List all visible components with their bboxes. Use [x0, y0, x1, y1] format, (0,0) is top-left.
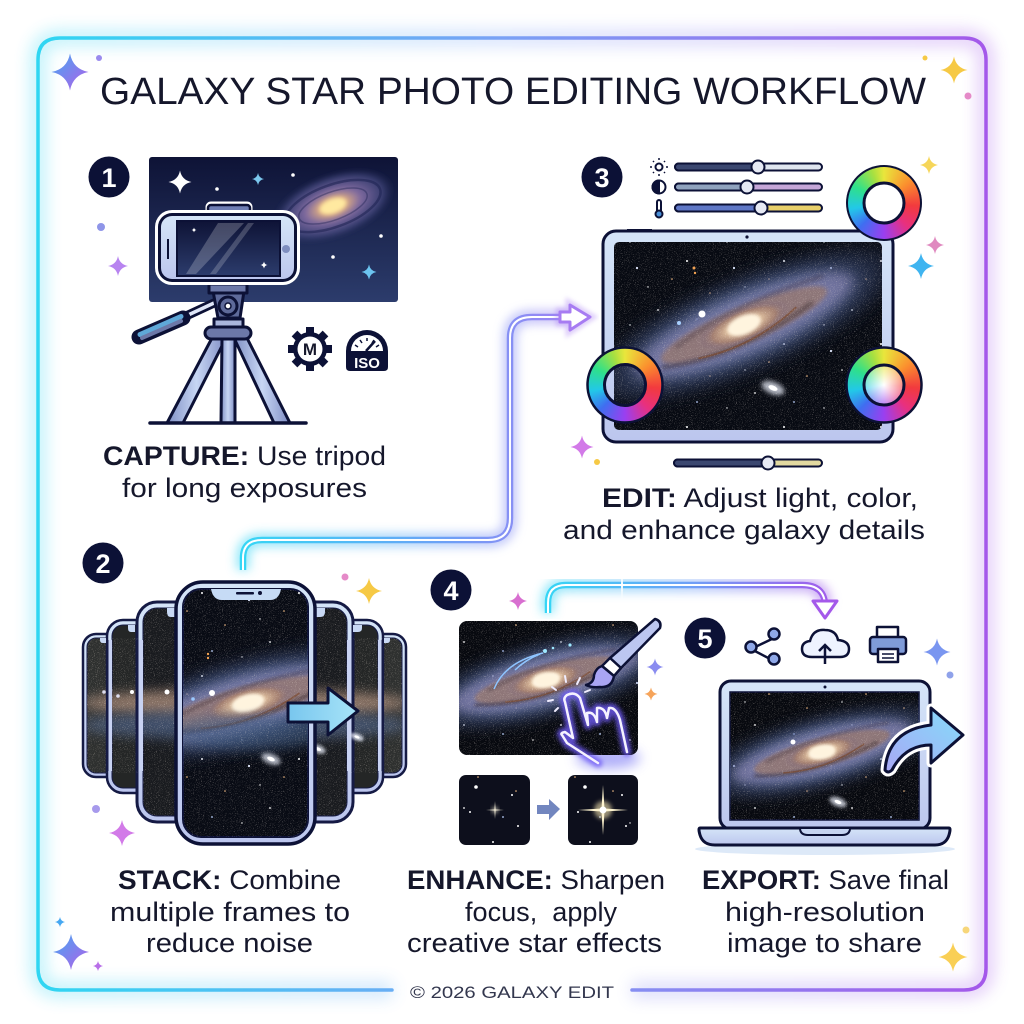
export caption: image to share	[727, 928, 922, 958]
edit caption	[563, 483, 925, 545]
panel: step 2 stack	[72, 542, 424, 958]
capture caption: for long exposures	[122, 473, 367, 503]
sparkles	[570, 156, 944, 465]
stack caption: reduce noise	[146, 928, 313, 958]
color wheel: right	[846, 348, 922, 422]
transfer arrow	[288, 688, 358, 735]
stack caption: STACK: Combine	[118, 865, 341, 895]
panel: step 4 enhance	[408, 570, 664, 952]
icon: ISO gauge	[346, 330, 388, 372]
icon: manual mode gear: M	[303, 340, 317, 359]
badge 1	[88, 156, 130, 198]
panel: step 5 export	[677, 618, 967, 958]
color wheel: top right	[846, 165, 922, 241]
badge 2	[82, 542, 124, 584]
icon: paintbrush	[586, 619, 660, 687]
color wheel: left	[588, 348, 662, 422]
edit caption: EDIT: Adjust light, color,	[602, 483, 918, 513]
tablet with galaxy	[602, 229, 894, 444]
icon: neon tap hand	[548, 676, 627, 763]
badge 4	[430, 570, 472, 610]
edit caption: and enhance galaxy details	[563, 515, 925, 545]
export caption: EXPORT: Save final	[702, 865, 949, 895]
title: GALAXY STAR PHOTO EDITING WORKFLOW	[100, 71, 926, 113]
badge 5	[684, 618, 726, 658]
icon: share	[746, 628, 780, 664]
capture caption	[103, 441, 386, 503]
enhance caption: ENHANCE: Sharpen	[407, 865, 665, 895]
badge 5: 5	[697, 624, 713, 654]
badge 3	[582, 156, 622, 198]
enhance caption: creative star effects	[407, 928, 662, 958]
export caption	[702, 865, 949, 958]
adjustment sliders	[650, 158, 822, 218]
stack caption	[110, 865, 350, 958]
bottom slider	[674, 456, 822, 470]
enhance caption: focus, apply	[465, 897, 617, 927]
front phone	[174, 580, 317, 846]
before star tile	[459, 775, 530, 845]
icon: ISO gauge: ISO	[354, 355, 380, 372]
badge 4: 4	[443, 576, 459, 606]
phone on tripod	[155, 204, 300, 285]
laptop with galaxy	[695, 680, 955, 855]
connector arrow: enhance to export	[548, 569, 837, 618]
export caption: high-resolution	[725, 897, 925, 927]
tripod	[139, 284, 306, 423]
footer: © 2026 GALAXY EDIT	[410, 984, 614, 1002]
enhance caption	[407, 865, 665, 958]
export arrow	[885, 708, 963, 772]
badge 1: 1	[101, 163, 117, 193]
connector arrow: stack to edit	[243, 305, 590, 570]
galaxy photo	[459, 621, 638, 755]
icon: printer	[870, 627, 906, 662]
panel: step 3 edit	[560, 156, 944, 545]
night sky panel	[149, 154, 404, 302]
badge 2: 2	[95, 549, 111, 579]
icon: manual mode gear	[288, 327, 332, 371]
panel: step 1 capture	[88, 154, 404, 503]
before-after arrow	[537, 799, 560, 820]
icon: cloud upload	[802, 630, 849, 664]
capture caption: CAPTURE: Use tripod	[103, 441, 386, 471]
after star tile	[568, 775, 638, 845]
stacked phone frames	[80, 602, 410, 822]
badge 3: 3	[594, 163, 610, 193]
stack caption: multiple frames to	[110, 897, 350, 927]
